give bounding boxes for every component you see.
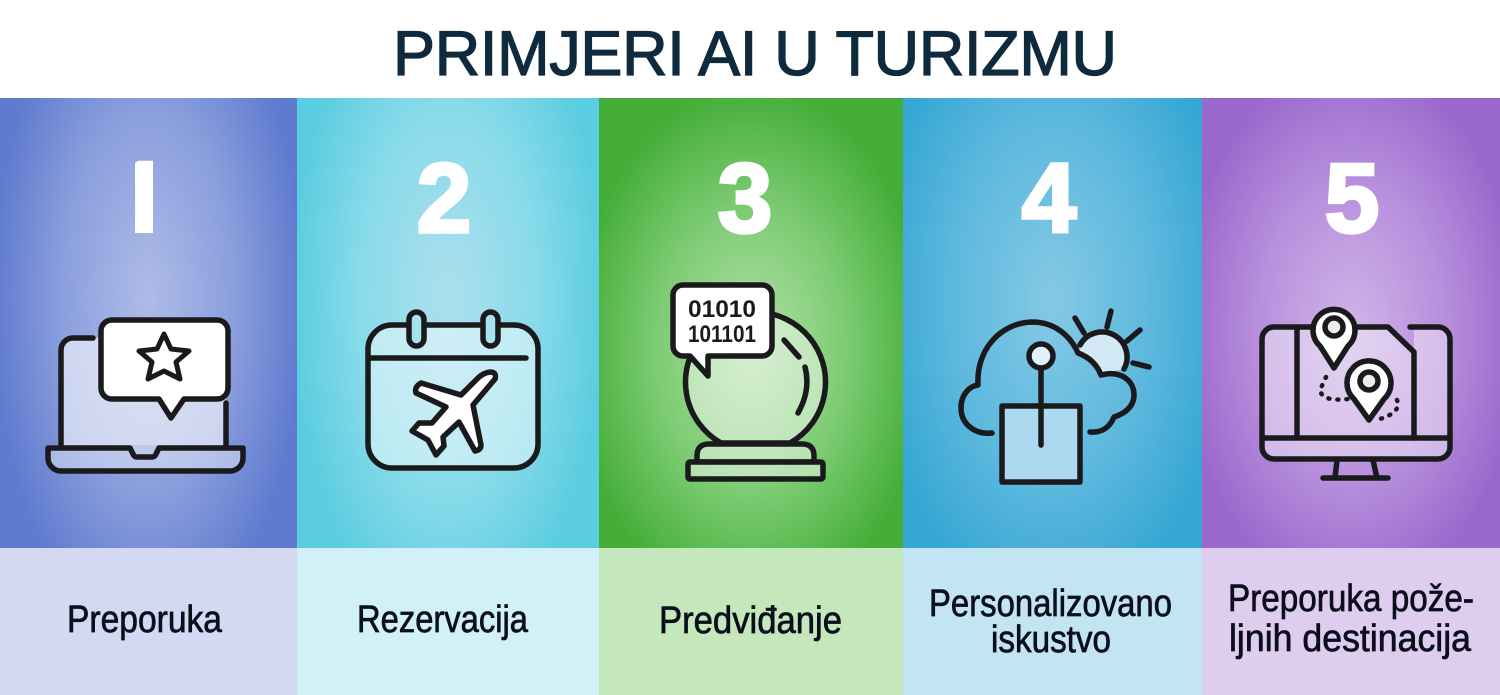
title: PRIMJERI AI U TURIZMU: [393, 19, 1117, 89]
panel 3 background: [599, 98, 903, 548]
label: Rezervacija: Rezervacija: [357, 599, 529, 641]
number 4: 4: [1022, 143, 1076, 253]
panel: 3 Predviđanje: [599, 98, 903, 695]
binary digits: [688, 296, 756, 348]
panel 1 background: [0, 98, 297, 548]
panel 1 label background: [0, 548, 297, 695]
icon: monitor with map pins: [1262, 309, 1450, 478]
icon: crystal ball with binary speech bubble: [673, 285, 826, 479]
panel 3 label background: [599, 548, 903, 695]
panel 2 background: [297, 98, 599, 548]
number 3: 3: [718, 143, 772, 253]
label: Personalizovano iskustvo: iskustvo: [991, 619, 1111, 661]
number 2: 2: [417, 143, 471, 253]
panel: 2 Rezervacija: [297, 98, 599, 695]
label: Preporuka poželjnih destinacija: [1228, 578, 1474, 660]
binary digits: 01010: [688, 296, 756, 323]
panel 2 label background: [297, 548, 599, 695]
icon: cloud with sun and touch switch: [961, 311, 1149, 482]
panel: 5 Preporuka poželjnih destinacija: [1202, 98, 1500, 695]
panel 4 background: [903, 98, 1202, 548]
icon: laptop with star speech bubble: [48, 320, 243, 471]
label: Personalizovano iskustvo: [929, 583, 1172, 661]
panel 4 label background: [903, 548, 1202, 695]
panel: 4 Personalizovano iskustvo: [903, 98, 1202, 695]
panel 5 background: [1202, 98, 1500, 548]
label: Preporuka poželjnih destinacija: ljnih destinacija: [1229, 618, 1472, 660]
label: Preporuka: Preporuka: [67, 599, 223, 641]
panel 5 label background: [1202, 548, 1500, 695]
panel: 1 Preporuka: [0, 98, 297, 695]
label: Predviđanje: Predviđanje: [659, 600, 842, 642]
icon: calendar with airplane: [368, 312, 538, 468]
binary digits: 101101: [688, 321, 756, 348]
number 5: 5: [1325, 143, 1379, 253]
number 1: 1: [116, 143, 170, 253]
label: Personalizovano iskustvo: Personalizovano: [929, 583, 1172, 625]
